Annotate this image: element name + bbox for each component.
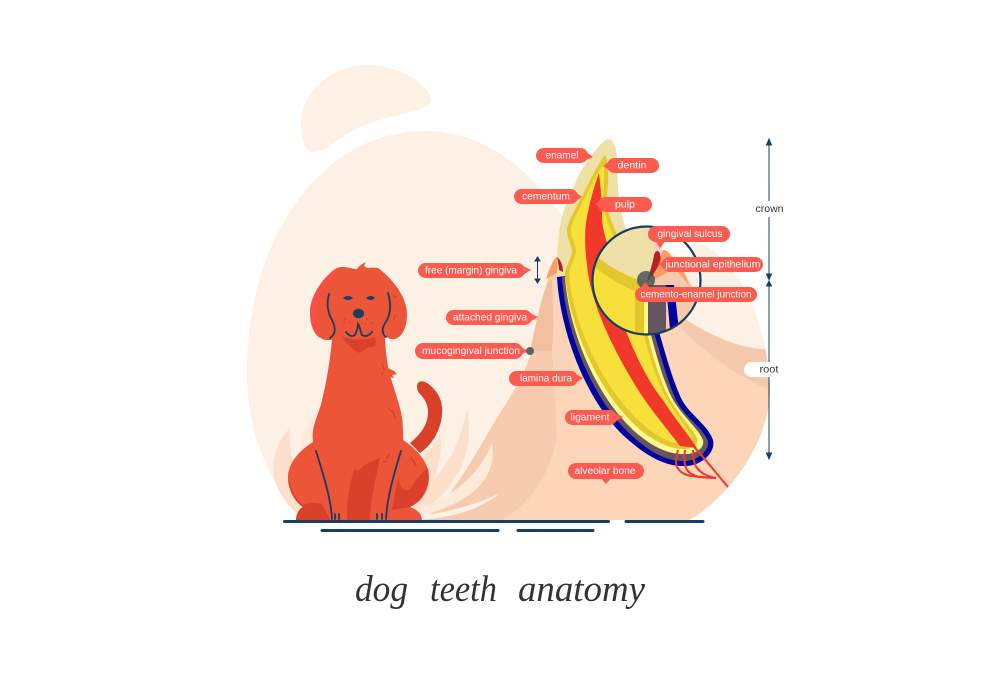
title: dog: [355, 569, 408, 610]
root label: [744, 362, 792, 377]
magnified free gingiva: [650, 250, 689, 285]
ligament: [562, 270, 708, 461]
magnified grey: [648, 285, 666, 334]
magnifier ring: [592, 226, 700, 334]
dog lines: [316, 293, 401, 519]
fur marks: [382, 296, 416, 465]
cementum strip: [565, 270, 703, 454]
freckles: [343, 318, 373, 325]
crown and root yellow: [569, 164, 692, 444]
bone right band: [679, 319, 770, 399]
magnified enamel: [598, 228, 655, 282]
label: gingival sulcus: gingival sulcus: [658, 228, 722, 240]
mucogingival dot: [526, 347, 534, 355]
title: teeth: [430, 569, 497, 610]
fur tufts: [274, 407, 500, 520]
label: cementum: cementum: [522, 190, 570, 202]
crown arrow: [766, 139, 772, 280]
alveolar bone and gum: [421, 262, 775, 521]
chest shadow: [341, 336, 376, 353]
tooth: [557, 139, 728, 487]
tail: [410, 381, 442, 453]
label: mucogingival junction: [415, 343, 528, 359]
title: anatomy: [518, 569, 646, 610]
pulp: [585, 173, 697, 448]
label: mucogingival junction: mucogingival junction: [422, 345, 520, 357]
chest tuft: [388, 368, 397, 378]
dentin: [565, 155, 697, 449]
magnified gold strip: [635, 291, 644, 334]
crown label: [752, 201, 788, 217]
gum inner stripe: [552, 280, 558, 322]
label: gingival sulcus: [648, 226, 730, 248]
gingiva sliver: [557, 257, 563, 272]
label: free gingiva: free (margin) gingiva: [425, 264, 517, 276]
label: dentin: [603, 158, 659, 173]
legs shadow: [347, 458, 380, 520]
label: alveolar bone: alveolar bone: [574, 465, 636, 477]
label: junctional epithelium: junctional epithelium: [665, 258, 761, 270]
label: dentin: dentin: [618, 160, 647, 172]
magnified blue: [666, 285, 678, 328]
labels: [415, 148, 763, 484]
label: enamel: enamel: [546, 150, 578, 162]
label: ligament: [565, 410, 623, 425]
attached gingiva band: [530, 280, 554, 351]
haunch shadows: [392, 468, 429, 510]
magnified pale background: [660, 250, 700, 287]
bone main: [502, 325, 770, 520]
label: lamina dura: lamina dura: [520, 372, 572, 384]
label: cementum: [514, 189, 582, 204]
root label: root: [760, 364, 779, 376]
gingiva height arrow: [535, 257, 540, 283]
eyes: [343, 296, 375, 300]
label: cemento-enamel junction: cemento-enamel junction: [640, 288, 752, 300]
free gingiva tip: [546, 257, 566, 279]
head tuft: [357, 262, 369, 269]
magnified yellow: [594, 267, 650, 332]
enamel: [557, 139, 655, 300]
magnified strip: [644, 283, 649, 334]
label: cemento-enamel junction: [635, 282, 757, 302]
gum left mountain: [423, 273, 558, 520]
label: pulp: pulp: [615, 198, 635, 210]
sulcus pink: [655, 242, 662, 254]
nose: [353, 309, 364, 318]
label: enamel: [536, 148, 593, 163]
nerves: [676, 447, 728, 487]
dog body: [288, 267, 429, 521]
dog: [288, 262, 442, 521]
cemento-enamel dot: [637, 271, 655, 289]
ground lines: [284, 522, 703, 530]
junctional epithelium: [647, 251, 661, 282]
label: attached gingiva: attached gingiva: [453, 312, 527, 324]
root periodontal outer: [557, 270, 713, 466]
label: free gingiva: [418, 263, 531, 278]
infographic: [247, 65, 783, 609]
background blob large: [247, 131, 770, 520]
magnified gold band: [596, 258, 638, 291]
crown label: crown: [756, 203, 784, 215]
root arrow: [766, 281, 772, 459]
magnifier: [590, 222, 705, 340]
label: lamina dura: [509, 371, 583, 386]
dog shadow left edge: [310, 268, 340, 338]
label: alveolar bone: [568, 463, 644, 484]
background blob small: [301, 65, 431, 152]
label: ligament: ligament: [570, 412, 610, 424]
magnified gum: [650, 250, 695, 330]
title: [355, 569, 646, 610]
label: pulp: [595, 197, 652, 212]
label: attached gingiva: [446, 310, 538, 325]
